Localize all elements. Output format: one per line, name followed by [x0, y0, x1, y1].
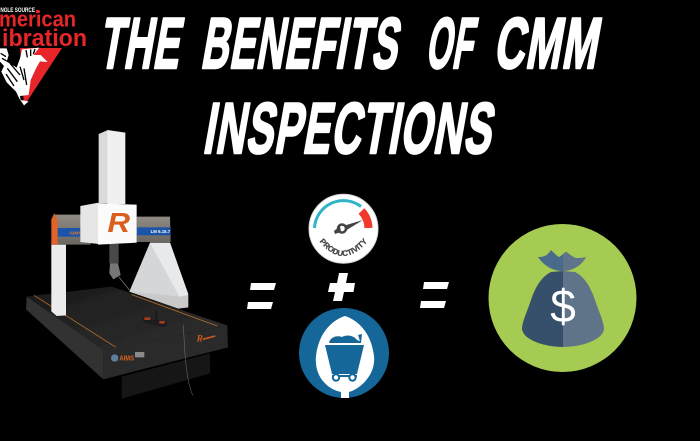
granite base shadow	[122, 353, 210, 399]
logo dot	[36, 10, 39, 13]
bag left half	[522, 271, 563, 347]
probe arm	[109, 244, 129, 290]
right support	[129, 243, 188, 309]
granite top surface	[27, 287, 227, 350]
gauge label	[316, 237, 371, 256]
base logo AIMS: AIMS	[119, 354, 134, 363]
CMM machine	[26, 130, 228, 399]
gauge needle	[334, 220, 363, 234]
left leg	[51, 245, 66, 316]
orange end cap	[51, 213, 58, 245]
icon: mining cart	[299, 308, 389, 398]
logo word vibration: ibration	[2, 25, 87, 52]
icon: productivity gauge: PRODUCTIVITY	[320, 238, 366, 256]
bag tie right	[563, 252, 586, 271]
band label: LM 6.15.7	[151, 229, 171, 234]
equals sign left	[247, 283, 276, 309]
logo: American Vibration	[0, 6, 87, 106]
gauge teal arc	[314, 201, 361, 228]
icon: money bag	[488, 224, 636, 372]
beam blue band left	[57, 228, 91, 237]
icon: productivity gauge	[308, 194, 378, 264]
eagle feather shading	[1, 49, 35, 86]
joystick controller	[143, 311, 167, 327]
logo word american: merican	[0, 6, 76, 32]
bag tie left	[538, 250, 563, 271]
logo triangle	[20, 48, 62, 106]
base logo R: R	[196, 334, 203, 344]
cart ore pile	[329, 334, 362, 343]
cart rail	[332, 375, 357, 377]
equals sign right	[420, 282, 449, 308]
base logo AIMS	[111, 352, 144, 363]
logo tagline: INGLE SOURCE	[0, 7, 35, 14]
dollar sign: $	[550, 280, 576, 332]
cart white drop	[316, 316, 374, 398]
title word: BENEFITS: BENEFITS	[197, 3, 408, 84]
title word: OF: OF	[422, 3, 483, 84]
logo eagle	[0, 48, 48, 105]
plus sign	[328, 273, 355, 301]
band brand: AIMS	[69, 230, 82, 236]
cart wheels	[333, 374, 356, 381]
carriage	[80, 203, 137, 245]
title word: CMM: CMM	[490, 3, 608, 84]
base logo R	[196, 334, 215, 344]
probe cable	[183, 325, 193, 395]
gauge red arc	[362, 211, 368, 228]
R logo: R	[107, 207, 131, 238]
vertical column	[99, 130, 125, 204]
orange rails	[34, 295, 217, 347]
cart body	[325, 345, 364, 374]
horizontal beam	[51, 213, 171, 245]
bag right half	[563, 271, 604, 347]
beam blue band right	[137, 227, 171, 235]
granite front right side	[103, 325, 228, 379]
title word: THE: THE	[95, 3, 190, 84]
title	[95, 3, 608, 169]
granite front left side	[26, 297, 103, 379]
